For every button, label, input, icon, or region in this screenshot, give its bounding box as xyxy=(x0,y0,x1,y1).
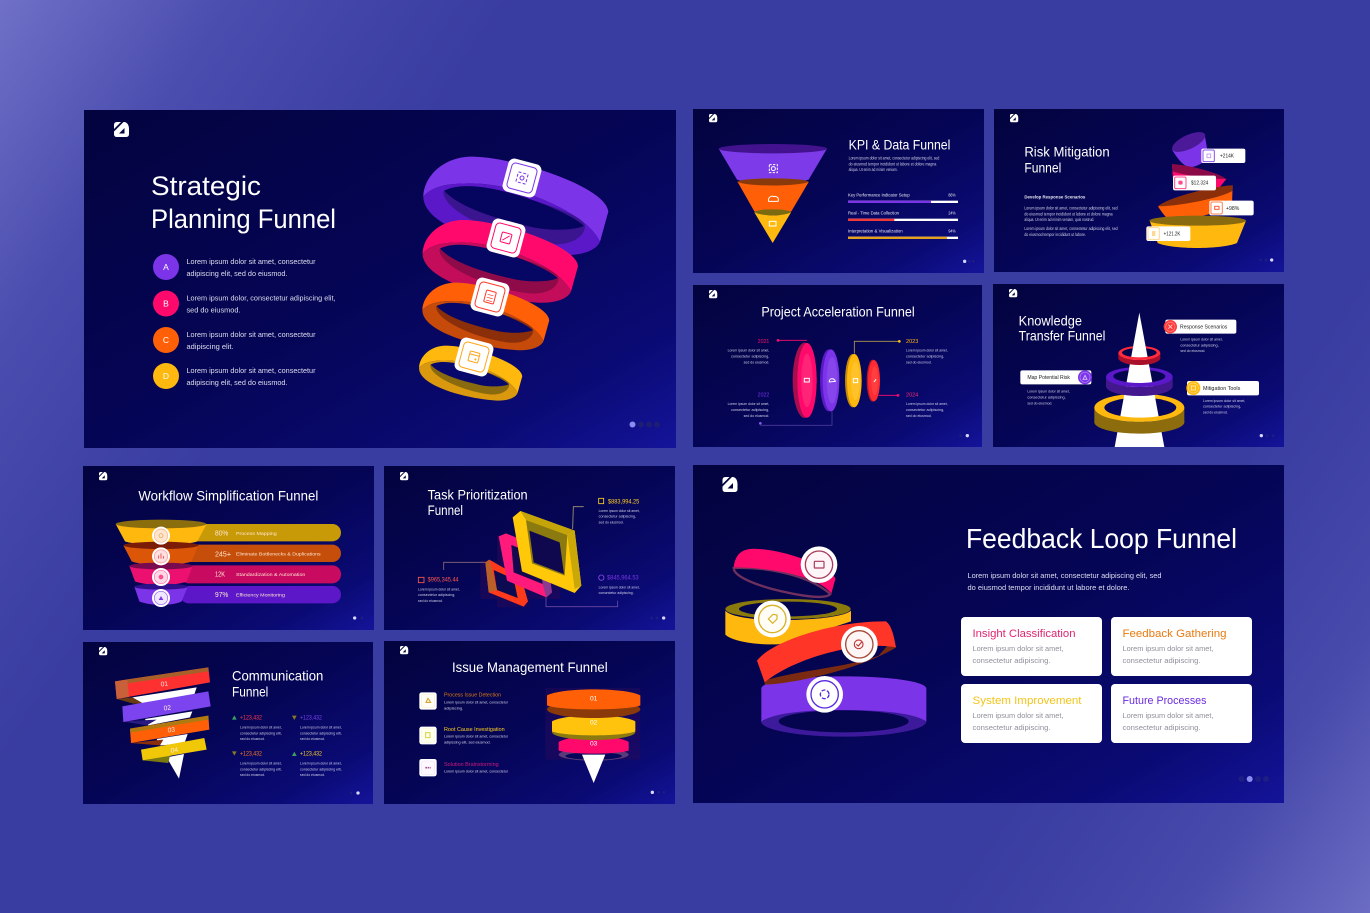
labels: bar values: 245+ xyxy=(215,549,231,558)
callout: Map Potential Risk: Map Potential Risk xyxy=(1027,375,1070,381)
chart: funnel bars xyxy=(116,520,341,607)
heading: Feedback Loop Funnel xyxy=(966,523,1237,554)
chart: nested diamond frames xyxy=(444,507,618,607)
text block: description: do eiusmod tempor incididunt ut labore et dolore magna xyxy=(849,161,937,166)
stat: purple: sed do eiusmod. xyxy=(300,736,325,741)
stat: red: sed do eiusmod. xyxy=(240,736,265,741)
panel: Risk Mitigation Funnel xyxy=(994,109,1284,272)
stat: $965,345.44 xyxy=(418,577,460,603)
text block: 2024: consectetur adipiscing, xyxy=(906,407,944,412)
text block: description: aliqua. Ut enim ad minim veniam. xyxy=(849,167,898,172)
icon: purple badge xyxy=(501,157,543,199)
list: items A to D xyxy=(153,254,336,389)
list: items A to D: D xyxy=(163,371,169,381)
card: Insight Classification: Insight Classification xyxy=(972,628,1076,640)
text block: 2023: consectetur adipiscing, xyxy=(906,354,944,359)
heading: Task Prioritization xyxy=(428,486,528,502)
stat: $965,345.44: consectetur adipiscing, xyxy=(418,592,455,597)
callout: Mitigation Tools: Lorem ipsum dolor sit amet, xyxy=(1203,398,1245,403)
panel: Project Acceleration Funnel xyxy=(693,285,982,447)
list: items A to D: Lorem ipsum dolor, consectetur adipiscing elit, xyxy=(186,294,336,302)
callout: +214K: +214K xyxy=(1220,154,1234,160)
stat: red xyxy=(232,715,282,741)
text block: 2021 xyxy=(728,339,769,365)
heading: Knowledge xyxy=(1019,312,1082,328)
text block: 2022 xyxy=(728,392,769,418)
text block: 2022: 2022 xyxy=(758,392,769,398)
pagination dots xyxy=(651,791,665,794)
pagination dots xyxy=(630,422,660,428)
panel: Strategic Planning Funnel xyxy=(84,110,676,448)
chart: progress bars xyxy=(848,193,958,239)
text block: response scenarios: Develop Response Scenarios xyxy=(1024,194,1086,199)
stat: $965,345.44: sed do eiusmod. xyxy=(418,598,443,603)
chart: tilted funnel segments xyxy=(1149,128,1246,248)
heading xyxy=(428,486,528,518)
callout: +214K xyxy=(1201,149,1245,163)
callout: +121.2K xyxy=(1146,226,1190,241)
chart: disc funnel timeline xyxy=(759,339,901,425)
stat: yellow: consectetur adipiscing elit, xyxy=(300,766,342,771)
chart: stacked bands funnel xyxy=(545,688,640,783)
chart: twisted stacked funnel: 02 xyxy=(163,704,172,712)
pagination dots xyxy=(959,434,969,437)
card: Process Issue Detection xyxy=(419,692,509,710)
text block: response scenarios: Lorem ipsum dolor sit amet, consectetur adipiscing elit, sed xyxy=(1024,205,1118,210)
chart: stacked funnel rings xyxy=(419,157,608,401)
chart: inverted cone funnel xyxy=(719,144,827,243)
heading xyxy=(1019,312,1105,343)
stat: yellow: +123,432 xyxy=(300,752,323,758)
icon: logo xyxy=(709,114,717,122)
callout: Map Potential Risk: consectetur adipiscing, xyxy=(1027,394,1066,399)
callout: Mitigation Tools: consectetur adipiscing, xyxy=(1203,404,1241,409)
icon: tag circle xyxy=(754,601,791,637)
stat: orange xyxy=(232,751,282,777)
stat: purple xyxy=(292,716,342,741)
callout: $12.324: $12.324 xyxy=(1191,181,1208,187)
chart: progress bars: Interpretation & Visualization xyxy=(848,229,903,234)
labels: bar values: 80% xyxy=(215,529,229,538)
ring: pink xyxy=(734,549,835,597)
text block: 2023: Lorem ipsum dolor sit amet, xyxy=(906,348,948,353)
icon: logo xyxy=(400,646,408,654)
icon: logo xyxy=(722,477,738,492)
stat: $965,345.44: $965,345.44 xyxy=(428,578,459,584)
card: Feedback Gathering xyxy=(1111,617,1252,676)
icon: logo xyxy=(99,472,107,480)
card: Future Processes: consectetur adipiscing. xyxy=(1122,723,1200,732)
callout: Response Scenarios: consectetur adipiscing, xyxy=(1180,342,1219,347)
chart: progress bars: Key Performance Indicator Setup xyxy=(848,193,910,198)
heading: Communication xyxy=(232,668,323,684)
callout: Response Scenarios: sed do eiusmod. xyxy=(1180,348,1205,353)
text block: 2021: sed do eiusmod. xyxy=(744,360,769,365)
list: items A to D: A xyxy=(163,262,169,272)
callout: $12.324 xyxy=(1173,176,1216,190)
card: Feedback Gathering: Lorem ipsum dolor sit amet, xyxy=(1122,644,1214,653)
text block: 2024: sed do eiusmod. xyxy=(906,413,932,418)
stat: $883,994.25: $883,994.25 xyxy=(608,499,640,505)
panel: Knowledge Transfer Funnel xyxy=(993,284,1284,447)
labels: bar values: Standardization & Automation xyxy=(236,572,306,578)
panel: Feedback Loop Funnel xyxy=(693,465,1284,803)
stat: orange: +123,432 xyxy=(240,752,263,758)
text block: response scenarios: Lorem ipsum dolor sit amet, consectetur adipiscing elit, sed xyxy=(1024,226,1118,231)
stat: $845,964.53: $845,964.53 xyxy=(607,576,639,582)
heading xyxy=(1024,144,1110,175)
heading: Workflow Simplification Funnel xyxy=(138,488,318,504)
heading: Transfer Funnel xyxy=(1019,327,1105,343)
card: Process Issue Detection: Process Issue Detection xyxy=(444,693,501,699)
stat: $883,994.25: Lorem ipsum dolor sit amet, xyxy=(599,508,640,513)
chart: stacked bands funnel: 03 xyxy=(590,741,598,748)
stat: yellow: Lorem ipsum dolor sit amet, xyxy=(300,760,342,765)
text block: 2024: Lorem ipsum dolor sit amet, xyxy=(906,401,948,406)
heading: KPI & Data Funnel xyxy=(849,137,950,153)
text block: response scenarios xyxy=(1024,194,1118,237)
text block: 2024: 2024 xyxy=(906,392,918,398)
chart: twisted stacked funnel: 04 xyxy=(170,747,179,755)
stat: orange: Lorem ipsum dolor sit amet, xyxy=(240,760,282,765)
stat: $883,994.25: sed do eiusmod. xyxy=(599,520,624,525)
heading: Strategic xyxy=(151,171,261,201)
icon: orange badge xyxy=(469,276,511,318)
list: items A to D: sed do eiusmod. xyxy=(186,306,240,314)
stat: orange: sed do eiusmod. xyxy=(240,772,265,777)
text block: 2022: consectetur adipiscing, xyxy=(731,407,769,412)
card: Insight Classification: consectetur adipiscing. xyxy=(972,656,1050,665)
text block: 2021: 2021 xyxy=(758,339,769,345)
card: Feedback Gathering: Feedback Gathering xyxy=(1122,628,1226,640)
card: System Improvement: Lorem ipsum dolor sit amet, xyxy=(972,711,1064,720)
card: System Improvement: consectetur adipiscing. xyxy=(972,723,1050,732)
card: Future Processes: Future Processes xyxy=(1122,695,1207,707)
panel: KPI and Data Funnel xyxy=(693,109,984,273)
stat: $883,994.25: consectetur adipiscing, xyxy=(599,514,636,519)
text block: description: Lorem ipsum dolor sit amet, consectetur adipiscing elit, sed xyxy=(849,155,940,160)
labels: bar values: Process Mapping xyxy=(236,531,277,537)
pagination dots xyxy=(1238,776,1269,782)
card: Insight Classification: Lorem ipsum dolor sit amet, xyxy=(972,644,1064,653)
panel: Communication Funnel xyxy=(83,642,373,804)
stat: red: Lorem ipsum dolor sit amet, xyxy=(240,724,282,729)
heading: Project Acceleration Funnel xyxy=(761,304,915,320)
ring: yellow xyxy=(725,599,851,644)
text block: 2023: 2023 xyxy=(906,339,918,345)
chart: stacked bands funnel: 02 xyxy=(590,720,598,727)
stat: $965,345.44: Lorem ipsum dolor sit amet, xyxy=(418,586,460,591)
icon: yellow badge xyxy=(453,336,495,378)
card: Feedback Gathering: consectetur adipiscing. xyxy=(1122,656,1200,665)
stat: purple: consectetur adipiscing elit, xyxy=(300,730,342,735)
text block: 2023: sed do eiusmod. xyxy=(906,360,932,365)
chart: progress bars: 94% xyxy=(948,229,956,234)
card: Root Cause Investigation: adipiscing elit, sed eiusmod. xyxy=(444,740,491,745)
stat: $883,994.25 xyxy=(599,498,640,525)
callout: +98% xyxy=(1209,201,1254,215)
pagination dots xyxy=(350,791,360,795)
labels: bar values: Efficiency Monitoring xyxy=(236,593,285,599)
stat: $845,964.53 xyxy=(599,575,640,595)
text block: response scenarios: aliqua. Ut enim ad minim veniam, quis nostrud. xyxy=(1024,217,1094,222)
chart: stacked tilted rings xyxy=(725,546,926,737)
labels: bar values: 97% xyxy=(215,590,229,599)
card: Process Issue Detection: adipiscing. xyxy=(444,705,463,710)
heading xyxy=(232,668,323,699)
callout: Response Scenarios xyxy=(1164,320,1236,353)
icon: comment circle xyxy=(801,546,837,583)
stat: yellow xyxy=(292,752,342,777)
labels: bar values xyxy=(215,529,321,599)
list: items A to D: Lorem ipsum dolor sit amet, consectetur xyxy=(186,366,316,375)
heading: Funnel xyxy=(1024,159,1061,175)
icon: logo xyxy=(99,647,107,655)
pagination dots xyxy=(1259,258,1273,262)
card: Future Processes xyxy=(1111,684,1252,743)
text block: description: Lorem ipsum dolor sit amet, consectetur adipiscing elit, sed xyxy=(968,571,1162,580)
callout: Map Potential Risk xyxy=(1020,370,1092,405)
chart: twisted stacked funnel xyxy=(115,667,211,779)
card: Insight Classification xyxy=(961,617,1102,676)
panel: Task Prioritization Funnel xyxy=(384,466,675,630)
icon: logo xyxy=(709,290,717,298)
text block: 2022: Lorem ipsum dolor sit amet, xyxy=(728,401,769,406)
stat: purple: +123,432 xyxy=(300,716,323,722)
callout: Mitigation Tools: sed do eiusmod. xyxy=(1203,410,1228,415)
list: items A to D: Lorem ipsum dolor sit amet, consectetur xyxy=(186,257,316,266)
heading xyxy=(151,171,336,234)
icon: pink badge xyxy=(485,217,527,259)
heading: Planning Funnel xyxy=(151,204,336,234)
text block: 2022: sed do eiusmod. xyxy=(744,413,769,418)
chart: progress bars: 24% xyxy=(948,211,956,216)
callout: Map Potential Risk: Lorem ipsum dolor sit amet, xyxy=(1027,388,1070,393)
icon: logo xyxy=(400,472,408,480)
chart: cone with rings xyxy=(1094,313,1184,447)
stat: $845,964.53: Lorem ipsum dolor sit amet, xyxy=(599,584,640,589)
ring: red xyxy=(757,621,896,685)
list: items A to D: adipiscing elit, sed do eiusmod. xyxy=(186,269,288,278)
list: items A to D: C xyxy=(163,335,169,345)
callout: Response Scenarios: Lorem ipsum dolor sit amet, xyxy=(1180,337,1223,342)
callout: Mitigation Tools: Mitigation Tools xyxy=(1203,386,1241,392)
callout: +121.2K: +121.2K xyxy=(1164,232,1181,238)
list: items A to D: adipiscing elit, sed do eiusmod. xyxy=(186,378,288,387)
callout: Response Scenarios: Response Scenarios xyxy=(1180,325,1228,331)
text block: 2024 xyxy=(906,392,948,418)
text block: description xyxy=(849,155,940,172)
card: System Improvement xyxy=(961,684,1102,743)
card: Future Processes: Lorem ipsum dolor sit amet, xyxy=(1122,711,1214,720)
card: Solution Brainstorming: Lorem ipsum dolor sit amet, consectetur xyxy=(444,769,509,774)
icon: logo xyxy=(114,122,129,137)
chart: progress bars: Real - Time Data Collection xyxy=(848,211,899,216)
text block: 2021: Lorem ipsum dolor sit amet, xyxy=(728,348,769,353)
callout: +98%: +98% xyxy=(1226,206,1240,212)
heading: Funnel xyxy=(428,502,463,518)
card: Solution Brainstorming xyxy=(419,759,509,776)
text block: description: do eiusmod tempor incididunt ut labore et dolore. xyxy=(968,583,1130,592)
panel: Workflow Simplification Funnel xyxy=(83,466,374,630)
stat: yellow: sed do eiusmod. xyxy=(300,772,325,777)
stat: orange: consectetur adipiscing elit, xyxy=(240,766,282,771)
pagination dots xyxy=(650,616,665,620)
text block: description xyxy=(968,571,1162,592)
card: Root Cause Investigation: Root Cause Investigation xyxy=(444,727,505,733)
card: Root Cause Investigation: Lorem ipsum dolor sit amet, consectetur xyxy=(444,734,509,739)
stat: $845,964.53: consectetur adipiscing. xyxy=(599,590,634,595)
text block: 2023 xyxy=(906,339,948,365)
list: items A to D: B xyxy=(163,298,169,308)
heading: Risk Mitigation xyxy=(1024,144,1110,160)
card: System Improvement: System Improvement xyxy=(972,695,1082,707)
stat: red: consectetur adipiscing elit, xyxy=(240,730,282,735)
list: items A to D: Lorem ipsum dolor sit amet, consectetur xyxy=(186,330,316,339)
icon: logo xyxy=(1009,289,1017,297)
card: Solution Brainstorming: Solution Brainstorming xyxy=(444,762,499,768)
chart: progress bars: 86% xyxy=(948,193,956,198)
pagination dots xyxy=(1260,434,1274,437)
callout: Mitigation Tools xyxy=(1186,381,1259,415)
chart: twisted stacked funnel: 01 xyxy=(160,680,169,688)
list: items A to D: adipiscing elit. xyxy=(186,342,234,351)
callout: Map Potential Risk: sed do eiusmod. xyxy=(1027,400,1052,405)
heading: Funnel xyxy=(232,683,268,699)
stat: purple: Lorem ipsum dolor sit amet, xyxy=(300,724,342,729)
icon: check circle xyxy=(841,626,878,663)
chart: twisted stacked funnel: 03 xyxy=(167,726,176,734)
icon: recycle circle xyxy=(806,676,843,713)
card: Process Issue Detection: Lorem ipsum dolor sit amet, consectetur xyxy=(444,699,509,704)
pagination dots xyxy=(963,260,975,263)
text block: response scenarios: do eiusmod tempor incididunt ut labore. xyxy=(1024,232,1086,237)
text block: response scenarios: do eiusmod tempor incididunt ut labore et dolore magna xyxy=(1024,211,1113,216)
labels: bar values: 12K xyxy=(215,570,225,579)
labels: bar values: Eliminate Bottlenecks & Duplications xyxy=(236,552,321,558)
text block: 2021: consectetur adipiscing, xyxy=(731,354,769,359)
stat: red: +123,432 xyxy=(240,716,263,722)
panel: Issue Management Funnel xyxy=(384,641,675,804)
chart: stacked bands funnel: 01 xyxy=(590,696,598,703)
card: Root Cause Investigation xyxy=(419,727,509,745)
pagination dots xyxy=(353,616,363,620)
heading: Issue Management Funnel xyxy=(452,659,608,675)
icon: logo xyxy=(1010,114,1018,122)
ring: purple xyxy=(761,676,926,737)
